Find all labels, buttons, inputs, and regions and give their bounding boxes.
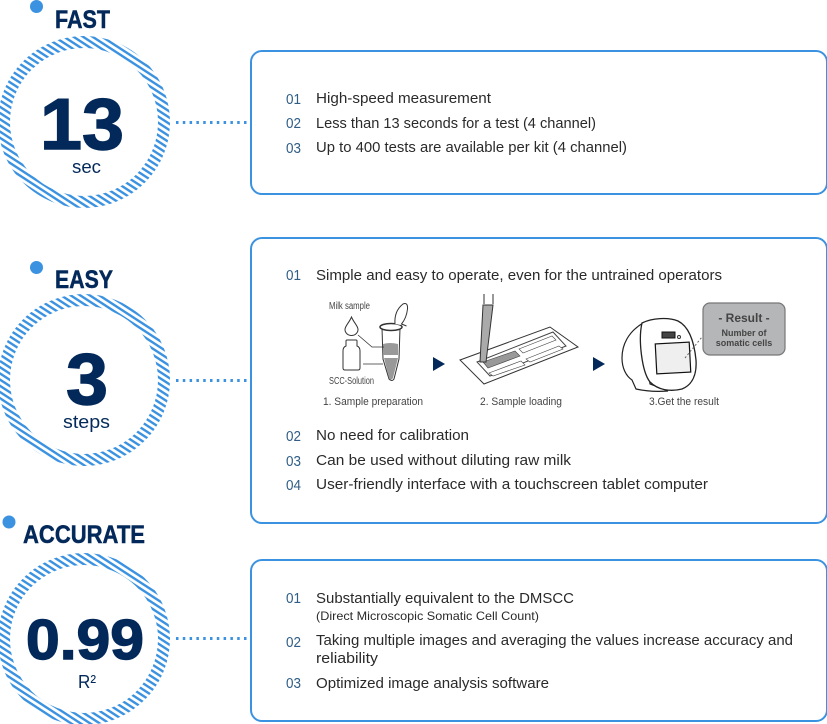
panel: fast details: Up to 400 tests are available per kit (4 channel): [316, 139, 627, 156]
panel: fast details: High-speed measurement: [316, 90, 492, 107]
hatched ring with 13 sec: 13: [40, 85, 124, 165]
panel: fast details: Less than 13 seconds for a test (4 channel): [316, 115, 596, 132]
panel: easy details: 03: [286, 454, 301, 470]
diagram: step 1 sample preparation: Milk sample: [329, 301, 370, 312]
diagram: step 1 sample preparation: [323, 301, 423, 408]
panel: easy details: 04: [286, 478, 301, 494]
bullet dot: [30, 0, 43, 13]
panel: accurate details: (Direct Microscopic Somatic Cell Count): [316, 609, 539, 623]
panel: accurate details: 03: [286, 676, 301, 692]
panel: accurate details: reliability: [316, 650, 379, 667]
panel: accurate details: Taking multiple images and averaging the values increase accuracy and: [316, 632, 793, 649]
diagram: step 1 sample preparation: SCC-Solution: [329, 376, 374, 387]
section: easy: [4, 238, 827, 523]
hatched ring with 13 sec: [4, 42, 164, 202]
panel: fast details: 03: [286, 141, 301, 157]
panel: fast details: [251, 51, 827, 194]
panel: easy details: Can be used without diluting raw milk: [316, 452, 572, 469]
diagram: step 3 result device: - Result -: [718, 311, 770, 325]
panel: easy details: Simple and easy to operate, even for the untrained operators: [316, 267, 722, 284]
section: fast: [4, 0, 827, 202]
panel: accurate details: Substantially equivalent to the DMSCC: [316, 590, 574, 607]
hatched ring with 0.99 R2: [4, 559, 164, 719]
hatched ring with 3 steps: [4, 300, 164, 460]
panel: accurate details: [251, 560, 827, 721]
hatched ring with 3 steps: 3: [66, 340, 108, 420]
arrow: [593, 357, 605, 371]
panel: accurate details: 01: [286, 591, 301, 607]
heading: EASY: EASY: [55, 266, 113, 294]
panel: easy details: 01: [286, 268, 301, 284]
hatched ring with 3 steps: steps: [63, 411, 110, 432]
panel: accurate details: Optimized image analysis software: [316, 675, 549, 692]
diagram: step 1 sample preparation: 1. Sample preparation: [323, 396, 423, 408]
diagram: step 3 result device: 3.Get the result: [649, 396, 719, 408]
panel: accurate details: 02: [286, 635, 301, 651]
panel: easy details: 02: [286, 429, 301, 445]
diagram: step 2 sample loading: 2. Sample loading: [480, 396, 562, 408]
hatched ring with 0.99 R2: R²: [78, 671, 96, 692]
panel: easy details: No need for calibration: [316, 427, 469, 444]
panel: easy details: User-friendly interface with a touchscreen tablet computer: [316, 476, 708, 493]
section: accurate: [2, 516, 827, 721]
dotted connector: [176, 121, 247, 124]
panel: easy details: [251, 238, 827, 523]
hatched ring with 13 sec: sec: [72, 156, 101, 177]
diagram: step 3 result device: somatic cells: [716, 338, 772, 348]
bullet dot: [30, 261, 43, 274]
panel: fast details: 02: [286, 116, 301, 132]
dotted connector: [176, 637, 247, 640]
diagram: step 3 result device: [622, 303, 785, 408]
arrow: [433, 357, 445, 371]
panel: fast details: 01: [286, 92, 301, 108]
bullet dot: [2, 516, 16, 528]
diagram: step 2 sample loading: [460, 294, 578, 408]
heading: ACCURATE: ACCURATE: [23, 521, 145, 549]
hatched ring with 0.99 R2: 0.99: [26, 608, 144, 672]
dotted connector: [176, 379, 247, 382]
heading: FAST: FAST: [55, 6, 110, 34]
diagram: step 3 result device: Number of: [722, 328, 768, 338]
